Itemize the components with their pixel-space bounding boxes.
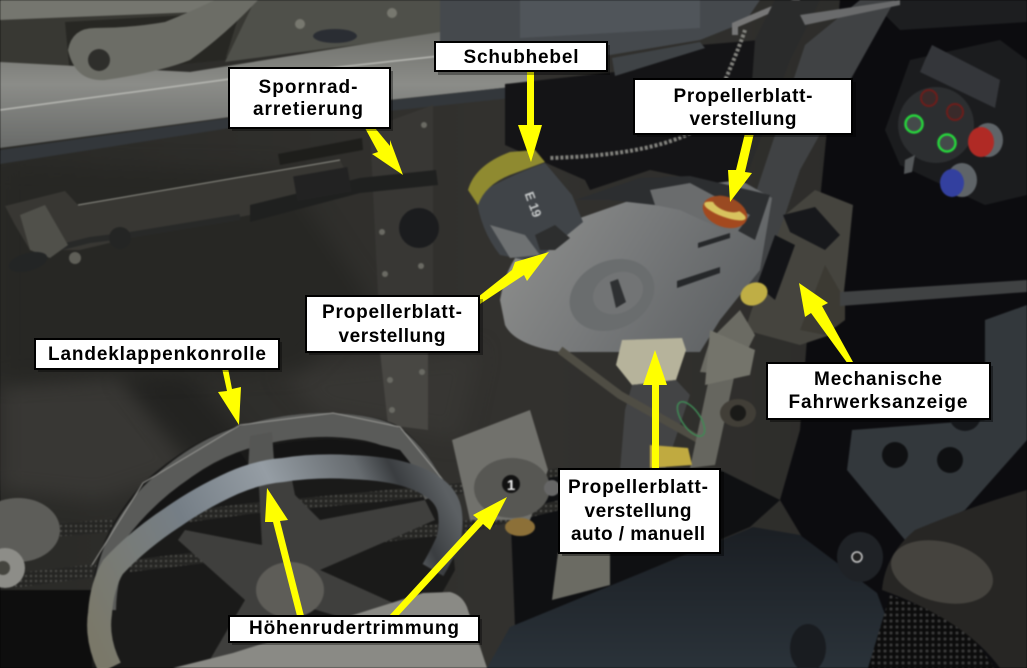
blue Langflug knob: [947, 163, 977, 197]
label: Propellerblattverstellung Mitte: verstellung: [338, 326, 446, 347]
arrow: Hoehenrudertrimmung Knopf: [389, 497, 507, 616]
label: Höhenrudertrimmung: [229, 616, 482, 645]
floor panel: [487, 527, 905, 668]
floor bolt: [790, 624, 826, 668]
grip ring: [99, 466, 451, 668]
label: Mechanische Fahrwerksanzeige: Mechanische: [814, 369, 942, 390]
arrow: Propellerblattverstellung Mitte: [478, 252, 549, 304]
label: Propellerblattverstellung oben: Propellerblatt-: [674, 86, 812, 107]
label: Propellerblattverstellung oben: verstellung: [690, 109, 796, 130]
shadow on rail: [313, 29, 357, 43]
rod: [735, 0, 800, 35]
yellow gear knob: [737, 278, 771, 310]
bracket hole: [88, 49, 110, 71]
label: Spornradarretierung: arretierung: [253, 99, 363, 120]
label: Propellerblattverstellung auto / manuell: Propellerblatt-: [568, 477, 708, 498]
arrow: Spornradarretierung: [365, 128, 403, 175]
linkage: [6, 205, 240, 276]
housing top dark edge: [575, 176, 770, 240]
label: Propellerblattverstellung oben: [634, 79, 856, 137]
arrow: Hoehenrudertrimmung Rad: [265, 488, 304, 616]
grip lettering: E 19: [522, 190, 545, 219]
elevator trim box: [452, 410, 560, 536]
central post: [745, 0, 820, 180]
right post: [690, 350, 740, 468]
tube to right: [612, 42, 705, 76]
control stick base: [868, 490, 1027, 668]
label: Propellerblattverstellung Mitte: [306, 296, 483, 355]
thumb switch: [535, 225, 570, 250]
landing gear indicator: [700, 190, 853, 375]
label: Propellerblattverstellung auto / manuell: [559, 469, 724, 556]
label: Mechanische Fahrwerksanzeige: Fahrwerksanzeige: [788, 392, 968, 413]
arrow: Schubhebel: [518, 70, 542, 162]
top rail: [0, 20, 530, 148]
rudder pedal frame: [847, 305, 1027, 540]
wheel spokes: [178, 470, 435, 668]
rail highlight: [0, 46, 520, 110]
switch AUS green rings: [906, 116, 922, 132]
white braid: [550, 30, 745, 158]
right black area: [780, 0, 1027, 668]
small pulley: [720, 399, 756, 427]
bracket lever: [68, 0, 258, 80]
rim fill between windows: [248, 432, 274, 470]
tailwheel lever plate: [5, 160, 350, 250]
label: Propellerblattverstellung Mitte: Propellerblatt-: [322, 302, 462, 323]
housing recess: [558, 246, 666, 344]
throttle yellow cap: [468, 150, 545, 205]
label: Propellerblattverstellung auto / manuell: verstellung: [584, 501, 692, 522]
stick knob: [837, 532, 883, 582]
tube below rail: [0, 85, 530, 164]
brand plates: [677, 267, 720, 288]
prop pitch knob: [698, 190, 752, 234]
lower black recess: [510, 470, 780, 627]
green safety ring: [672, 397, 710, 441]
elevator trim box: 1: [507, 477, 515, 494]
push rod: [560, 350, 700, 440]
label: Schubhebel: Schubhebel: [464, 47, 578, 68]
chains: [0, 468, 560, 590]
left sprocket: [0, 498, 60, 588]
upper wall above rail: [0, 0, 520, 75]
arrow: Propellerblattverstellung oben: [728, 133, 754, 202]
tailwheel knob: [399, 208, 439, 248]
label: Höhenrudertrimmung: Höhenrudertrimmung: [249, 618, 459, 639]
rim windows: [125, 440, 412, 540]
arrow: Mechanische Fahrwerksanzeige: [799, 283, 853, 364]
recess pin: [610, 279, 626, 308]
switch block: [616, 338, 686, 385]
vertical riveted strip: [370, 105, 433, 430]
lever plate edge: [78, 160, 340, 205]
bottom front metal: [173, 592, 487, 668]
label: Spornradarretierung: Spornrad-: [258, 77, 358, 98]
wheel hub: [256, 562, 324, 618]
arrow: Landeklappenkontrolle: [218, 368, 241, 425]
yellow weathered block: [650, 445, 692, 468]
magneto panel: [885, 40, 1027, 205]
black recess: [505, 40, 760, 190]
flap wheel: [92, 413, 470, 668]
red Flug knob: [973, 123, 1003, 157]
label: Landeklappenkonrolle: Landeklappenkonrolle: [48, 344, 266, 365]
grip worn patches: [490, 225, 540, 258]
rivets on upper wall: [295, 8, 397, 29]
arrow: Propellerblattverstellung auto/manuell: [643, 350, 667, 470]
label: Mechanische Fahrwerksanzeige: [767, 363, 993, 422]
gear rod: [840, 280, 1027, 306]
wheel rim: [104, 425, 436, 610]
switch EIN red rings: [921, 90, 937, 106]
upper centre grey box: [440, 0, 760, 55]
tailwheel rod: [250, 170, 438, 222]
throttle grip: [476, 163, 583, 262]
placard: [278, 138, 363, 165]
label: Schubhebel: [435, 42, 610, 75]
label: Landeklappenkonrolle: [35, 339, 282, 372]
wheel interior chains: [130, 483, 460, 530]
label: Propellerblattverstellung auto / manuell: auto / manuell: [571, 524, 705, 545]
throttle housing: [500, 180, 772, 352]
light and shadow on side panel: [0, 165, 480, 668]
label: Spornradarretierung: [229, 68, 393, 131]
